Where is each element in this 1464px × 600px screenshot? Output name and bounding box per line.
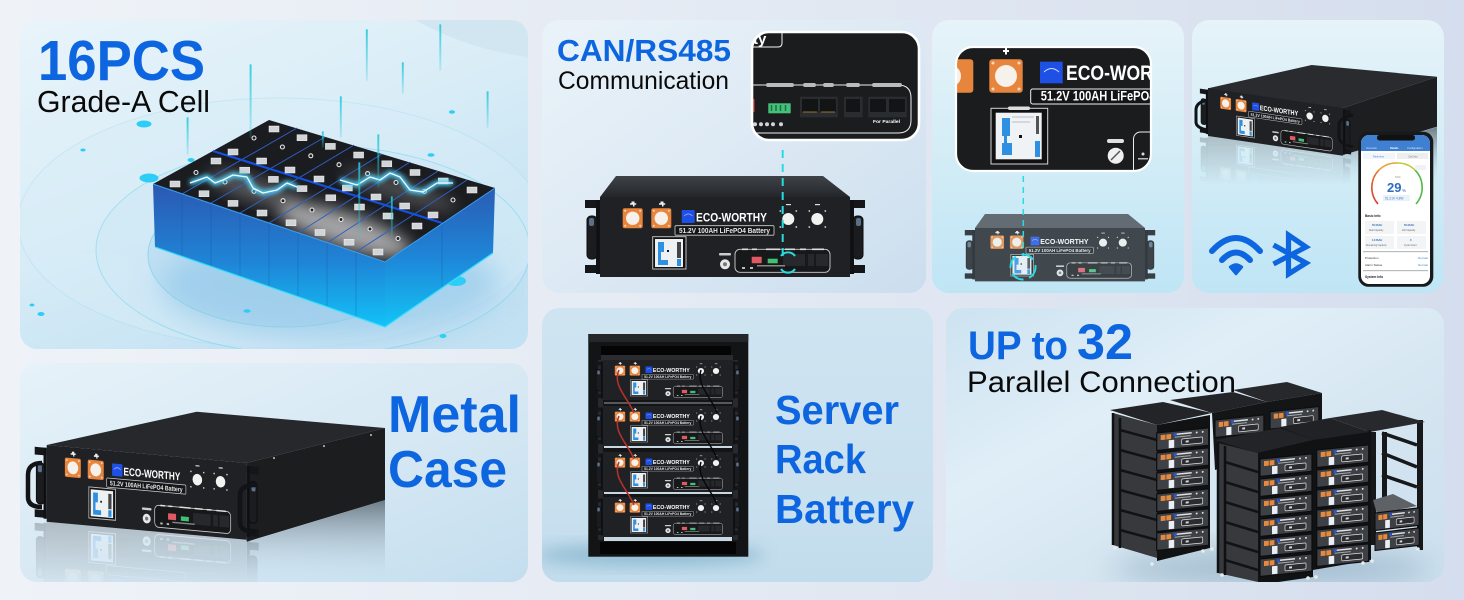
battery top and side	[1208, 65, 1437, 108]
icon: phone with app: System Info	[1365, 275, 1383, 279]
rack B	[1215, 428, 1318, 585]
icon: phone with app: Normal	[1418, 256, 1428, 260]
icon: phone with app: 14.56AH	[1372, 238, 1382, 242]
rack with four batteries	[588, 334, 748, 557]
heading: Battery: Battery	[775, 486, 914, 532]
panel: up to 32 parallel	[946, 308, 1444, 585]
rack battery 2: 51.2V 100AH LiFePO4 Battery	[644, 421, 691, 425]
battery front: ECO-WORTHY	[1040, 237, 1089, 246]
back row racks	[1170, 382, 1322, 470]
icon: phone with app	[1358, 132, 1433, 287]
rack battery 2: ECO-WORTHY	[653, 414, 690, 420]
battery front face: ECO-WORTHY	[124, 467, 180, 484]
icon: phone with app: Details	[1390, 146, 1399, 150]
battery front face	[35, 444, 259, 541]
rack C	[1280, 418, 1374, 570]
subheading: Communication: Communication	[558, 67, 729, 95]
battery top	[975, 214, 1145, 228]
rack battery 1: 51.2V 100AH LiFePO4 Battery	[644, 375, 691, 379]
heading: Server: Server	[775, 387, 899, 433]
heading: 16PCS: 16PCS	[38, 29, 205, 93]
heading line: Case: Case	[388, 441, 507, 499]
heading number: 32: 32	[1077, 314, 1133, 370]
panel: 16PCS Grade-A cell	[18, 20, 542, 355]
side shadow on floor	[247, 500, 385, 560]
panel: breaker zoom	[932, 20, 1197, 293]
icon: phone with app: Configuration	[1407, 146, 1423, 150]
icon: phone with app: Alarm Status	[1365, 263, 1383, 267]
subheading: Grade-A Cell: Grade-A Cell	[37, 84, 210, 119]
rising data beams	[187, 25, 488, 237]
side shadow on floor	[1343, 127, 1437, 170]
panel: CAN/RS485 communication	[542, 20, 926, 293]
battery reflection	[1200, 136, 1351, 178]
battery front: ECO-WORTHY	[1260, 105, 1299, 118]
arrow: dashed link to ports	[781, 150, 795, 273]
icon: phone with app: Cell Info	[1408, 154, 1418, 158]
rack battery 2	[595, 406, 741, 446]
icon: phone with app: 0	[1410, 238, 1412, 242]
subheading: Parallel Connection: Parallel Connection	[967, 366, 1236, 399]
inset: breaker and logo zoom: ECO-WORTHY	[1066, 62, 1188, 85]
icon: bluetooth	[1274, 235, 1306, 274]
rack D open frame	[1330, 410, 1425, 551]
panel: server rack battery	[535, 308, 933, 582]
panel: metal case	[20, 363, 528, 600]
black power cables	[700, 370, 717, 505]
heading: Rack: Rack	[775, 436, 866, 482]
battery handles	[28, 463, 256, 532]
battery front: ECO-WORTHY	[696, 211, 767, 224]
icon: phone with app: Protection	[1365, 256, 1379, 260]
battery front: 51.2V 100AH LiFePO4 Battery	[1251, 112, 1301, 124]
icon: phone with app: Full Capacity	[1402, 229, 1416, 232]
red power cables	[617, 370, 634, 505]
heading: CAN/RS485: CAN/RS485	[557, 33, 731, 68]
heading: UP to: UP to	[968, 324, 1068, 368]
inset: breaker and logo zoom	[954, 46, 1152, 172]
icon: phone with app: Overview	[1366, 146, 1377, 150]
battery front: 51.2V 100AH LiFePO4 Battery	[679, 228, 770, 235]
rack battery 3: ECO-WORTHY	[653, 460, 690, 466]
icon: phone with app: Basic Info:	[1365, 214, 1381, 218]
battery front	[965, 228, 1155, 281]
icon: phone with app: 50.00AH	[1404, 223, 1414, 227]
icon: phone with app: 29	[1387, 180, 1401, 195]
battery reflection	[34, 520, 259, 579]
inset: communication ports zoom: For Parallel	[873, 119, 900, 125]
icon: phone with app: Remaining Capacity	[1366, 244, 1387, 247]
rack battery 4	[595, 497, 741, 537]
battery front	[585, 197, 865, 277]
battery top and side	[47, 412, 385, 463]
icon: phone with app: %	[1402, 188, 1406, 193]
rack shadow	[1110, 552, 1430, 584]
rack battery 4: ECO-WORTHY	[653, 505, 690, 511]
cell pack top face	[153, 120, 495, 268]
rack battery 1	[595, 360, 741, 400]
heading: Metal Case: Metal	[388, 386, 521, 444]
icon: phone with app: 50.00AH	[1372, 223, 1382, 227]
floating ring dots	[30, 110, 466, 338]
icon: phone with app: Cycle Count	[1404, 244, 1417, 247]
lightning arcs	[190, 173, 453, 193]
icon: phone with app: 51.21V 4.8W	[1385, 196, 1403, 200]
battery front face: 51.2V 100AH LiFePO4 Battery	[110, 480, 183, 494]
icon: wifi	[1212, 238, 1260, 274]
rack battery 3: 51.2V 100AH LiFePO4 Battery	[644, 467, 691, 471]
icon: phone with app: Real-time	[1373, 154, 1385, 158]
arrow: dashed link to breaker	[1010, 176, 1036, 280]
inset: communication ports zoom	[745, 28, 919, 140]
rack battery 4: 51.2V 100AH LiFePO4 Battery	[644, 512, 691, 516]
battery top	[600, 176, 850, 197]
icon: phone with app: SOC	[1395, 175, 1401, 179]
panel: wireless app monitoring	[1192, 20, 1444, 293]
rack A	[1110, 402, 1214, 566]
cell pack side faces	[153, 184, 495, 327]
rack floor shadow	[535, 544, 765, 566]
battery handles	[1196, 100, 1353, 147]
inset: communication ports zoom: ty	[753, 31, 767, 48]
rack battery 3	[595, 452, 741, 492]
rack battery 1: ECO-WORTHY	[653, 368, 690, 374]
icon: phone with app: Normal	[1418, 263, 1428, 267]
icon: phone with app: Real Capacity	[1369, 229, 1384, 232]
battery front: 51.2V 100AH LiFePO4 Battery	[1029, 248, 1091, 253]
inset: breaker and logo zoom: 51.2V 100AH LiFePO4 Battery	[1041, 88, 1197, 104]
battery front	[1200, 87, 1351, 157]
